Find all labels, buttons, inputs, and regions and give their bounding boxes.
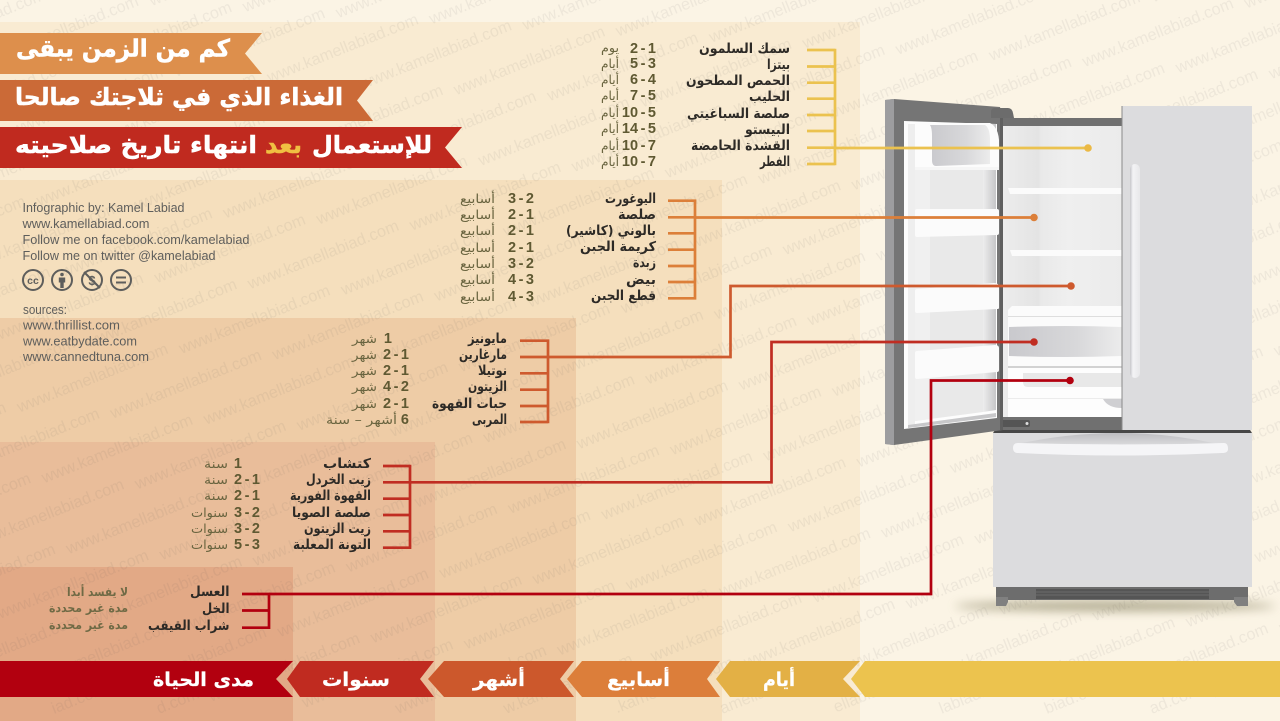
durations: years: 2 - 1 xyxy=(234,488,260,504)
durations: months: أشهر – سنة xyxy=(326,411,397,428)
connector: weeks xyxy=(695,214,1038,221)
list: weeks xyxy=(460,190,695,305)
durations: weeks: 4 - 3 xyxy=(508,272,534,288)
list: months xyxy=(326,331,548,428)
durations: years: سنة xyxy=(204,456,228,471)
title ribbons xyxy=(0,33,462,168)
durations: years: سنوات xyxy=(191,521,228,537)
food names: days: الفطر xyxy=(759,154,790,170)
food names: months: مايونيز xyxy=(467,331,507,347)
floor shadow xyxy=(955,601,1275,611)
title line 3 xyxy=(0,127,462,168)
durations: months: شهر xyxy=(351,379,377,395)
food names: years: زيت الخردل xyxy=(306,472,371,488)
durations: months: 6 xyxy=(401,412,409,428)
food names: lifetime xyxy=(148,584,230,634)
timeline: months: أشهر xyxy=(472,667,525,691)
refrigerator xyxy=(885,99,1275,611)
timeline: years xyxy=(287,661,434,697)
freezer drawer xyxy=(993,430,1252,606)
food names: weeks: زبدة xyxy=(633,255,656,271)
durations: weeks: 3 - 2 xyxy=(508,191,534,207)
bracket: lifetime xyxy=(242,593,269,629)
fridge interior xyxy=(1000,118,1122,430)
food names: weeks: اليوغورت xyxy=(605,191,656,207)
food names: lifetime: شراب القيقب xyxy=(148,618,230,634)
door bin top xyxy=(915,123,999,170)
durations: years: سنوات xyxy=(191,537,228,553)
durations: days: 10 - 5 xyxy=(622,105,656,121)
food names: years: كتشاب xyxy=(323,456,371,472)
durations: days: 2 - 1 xyxy=(630,41,656,57)
text: labiad.com xyxy=(936,672,1016,718)
durations: lifetime: لا يفسد أبدا xyxy=(67,584,128,599)
text: iad.com xyxy=(49,680,108,718)
timeline: lifetime: مدى الحياة xyxy=(153,669,254,691)
durations: months: شهر xyxy=(351,363,377,379)
durations: months: شهر xyxy=(351,347,377,363)
durations: days: أيام xyxy=(601,120,619,136)
connector: lifetime xyxy=(269,377,1074,594)
durations: years: 1 xyxy=(234,456,242,472)
durations: weeks: أسابيع xyxy=(460,206,495,222)
panel: years band xyxy=(0,442,435,721)
text: www.kamellabiad.com xyxy=(298,635,456,712)
durations: years: 5 - 3 xyxy=(234,537,260,553)
durations: years: سنة xyxy=(204,488,228,503)
durations: years: 3 - 2 xyxy=(234,505,260,521)
durations: weeks: أسابيع xyxy=(460,239,495,255)
text: biad.com xyxy=(1042,677,1110,718)
durations: years: 3 - 2 xyxy=(234,521,260,537)
text: d.com xyxy=(154,685,202,718)
food names: years: القهوة الفورية xyxy=(290,488,371,504)
durations: days: 14 - 5 xyxy=(622,121,656,137)
durations: days: أيام xyxy=(601,87,619,103)
timeline: months xyxy=(428,661,574,697)
title line 1 xyxy=(0,33,262,74)
food names: months: نوتيلا xyxy=(478,363,507,379)
durations: days: يوم xyxy=(601,40,620,56)
icons: creative commons licence: cc xyxy=(27,275,39,287)
crisper drawers xyxy=(1008,306,1122,417)
text: amellabiad.com xyxy=(717,659,830,718)
food names: years: زيت الزيتون xyxy=(304,521,371,537)
sources text block: www.thrillist.com xyxy=(22,318,120,332)
durations: days: 6 - 4 xyxy=(630,72,656,88)
right door xyxy=(1122,106,1252,430)
text: ad.com xyxy=(1147,681,1203,718)
bracket: years xyxy=(383,465,410,549)
bracket: months xyxy=(520,339,548,423)
durations: weeks: أسابيع xyxy=(460,271,495,287)
food names: months: مارغارين xyxy=(459,347,507,363)
food names: months: المربى xyxy=(472,412,507,428)
durations: weeks: 2 - 1 xyxy=(508,240,534,256)
bottom sill and hinge xyxy=(1000,420,1030,427)
bracket: days xyxy=(807,49,835,165)
text: .kamellabiad.com xyxy=(612,653,736,717)
timeline: open end xyxy=(851,661,1280,697)
durations: months: شهر xyxy=(351,396,377,412)
durations: days: 10 - 7 xyxy=(622,154,656,170)
door top hinge xyxy=(991,108,1014,118)
food names: days: بيتزا xyxy=(767,57,790,73)
durations: months: 1 xyxy=(384,331,392,347)
timeline ribbon xyxy=(0,661,1280,697)
durations: days: 5 - 3 xyxy=(630,56,656,72)
durations: days: أيام xyxy=(601,104,619,120)
text: www.kamellabiad.com xyxy=(205,629,362,706)
connector: years xyxy=(410,338,1038,482)
timeline: weeks xyxy=(567,661,720,697)
durations: weeks: أسابيع xyxy=(460,222,495,238)
sources text block xyxy=(22,302,149,364)
durations: days: أيام xyxy=(601,55,619,71)
durations: weeks: أسابيع xyxy=(460,288,495,304)
credits text block: Follow me on twitter @kamelabiad xyxy=(22,248,216,263)
durations: lifetime xyxy=(49,584,128,632)
food names: weeks: بيض xyxy=(626,272,656,288)
panel: days band xyxy=(0,22,860,721)
panel: months band xyxy=(0,318,576,721)
food names: weeks: كريمة الجبن xyxy=(580,239,656,255)
list: days xyxy=(601,40,835,170)
durations: months: شهر xyxy=(351,331,377,347)
durations: weeks xyxy=(460,190,534,305)
shelves xyxy=(1008,188,1122,256)
open left door xyxy=(885,99,1014,445)
food names: days: الحمص المطحون xyxy=(686,73,790,89)
timeline: days xyxy=(716,661,860,697)
durations: months: 2 - 1 xyxy=(383,396,409,412)
food names: days: سمك السلمون xyxy=(699,41,790,57)
durations: lifetime: مدة غير محددة xyxy=(49,601,128,615)
credits text block xyxy=(22,200,250,263)
door bins xyxy=(915,209,999,379)
durations: weeks: 2 - 1 xyxy=(508,207,534,223)
title line 3: انتهاء تاريخ صلاحيته xyxy=(15,131,257,159)
title line 2: الغذاء الذي في ثلاجتك صالحا xyxy=(15,83,343,111)
food names: years xyxy=(290,456,371,553)
title line 3: بعد xyxy=(265,131,302,159)
durations: years: سنوات xyxy=(191,505,228,521)
durations: days xyxy=(601,40,656,170)
food names: days: القشدة الحامضة xyxy=(691,138,790,154)
timeline: years: سنوات xyxy=(322,669,390,691)
food names: lifetime: الخل xyxy=(202,601,230,617)
text: www.kamellabiad.com xyxy=(112,623,269,700)
food names: lifetime: العسل xyxy=(190,584,230,600)
text: ellabiad.com xyxy=(831,666,922,716)
durations: lifetime: مدة غير محددة xyxy=(49,618,128,632)
food names: months: الزيتون xyxy=(468,379,507,395)
durations: days: 10 - 7 xyxy=(622,138,656,154)
durations: days: أيام xyxy=(601,71,619,87)
durations: years: 2 - 1 xyxy=(234,472,260,488)
sources text block: www.eatbydate.com xyxy=(22,334,137,348)
list: years xyxy=(191,456,410,553)
icons: creative commons licence xyxy=(23,270,131,290)
food names: weeks: بالوني (كاشير)‏ xyxy=(566,223,656,239)
text: www.kamellabiad.com xyxy=(19,617,176,694)
connector: days xyxy=(835,144,1092,152)
credits text block: Follow me on facebook.com/kamelabiad xyxy=(22,232,250,247)
title line 3: للإستعمال xyxy=(312,131,432,159)
food names: months: حبات القهوة xyxy=(432,396,507,412)
timeline: weeks: أسابيع xyxy=(607,667,670,691)
food names: days: صلصة السباغيتي xyxy=(687,106,790,122)
durations: months: 4 - 2 xyxy=(383,379,409,395)
panel: lifetime band xyxy=(0,567,293,721)
connector: months xyxy=(548,282,1075,357)
list: lifetime xyxy=(49,584,269,634)
food names: weeks: قطع الجبن xyxy=(591,288,656,304)
durations: weeks: 2 - 1 xyxy=(508,223,534,239)
food names: months xyxy=(432,331,507,428)
food names: days: البيستو xyxy=(744,122,790,138)
durations: months xyxy=(326,331,409,428)
food names: years: صلصة الصويا xyxy=(292,505,371,521)
durations: months: 2 - 1 xyxy=(383,363,409,379)
durations: days: 7 - 5 xyxy=(630,88,656,104)
durations: months: 2 - 1 xyxy=(383,347,409,363)
durations: weeks: 4 - 3 xyxy=(508,289,534,305)
food names: weeks: صلصة xyxy=(618,207,656,223)
food names: days: الحليب xyxy=(749,89,790,105)
text: www.kamellabiad.com xyxy=(392,641,549,718)
durations: weeks: أسابيع xyxy=(460,190,495,206)
durations: days: أيام xyxy=(601,137,619,153)
food names: weeks xyxy=(566,191,656,304)
panel: weeks band xyxy=(0,180,722,721)
sources text block: www.cannedtuna.com xyxy=(22,349,149,364)
durations: years xyxy=(191,456,260,553)
food names: days xyxy=(686,41,790,170)
credits text block: www.kamellabiad.com xyxy=(22,216,150,231)
durations: days: أيام xyxy=(601,153,619,169)
durations: years: سنة xyxy=(204,472,228,487)
sources text block: sources: xyxy=(23,302,67,317)
bracket: weeks xyxy=(668,199,695,300)
food names: years: التونة المعلبة xyxy=(293,537,371,553)
credits text block: Infographic by: Kamel Labiad xyxy=(22,200,184,215)
durations: weeks: 3 - 2 xyxy=(508,256,534,272)
title line 2 xyxy=(0,80,373,121)
durations: weeks: أسابيع xyxy=(460,255,495,271)
timeline: lifetime xyxy=(0,661,293,697)
timeline: days: أيام xyxy=(763,667,795,691)
title line 1: كم من الزمن يبقى xyxy=(16,34,230,62)
icons: creative commons licence: $ xyxy=(88,273,96,288)
text: w.kamellabiad.com xyxy=(500,650,635,718)
